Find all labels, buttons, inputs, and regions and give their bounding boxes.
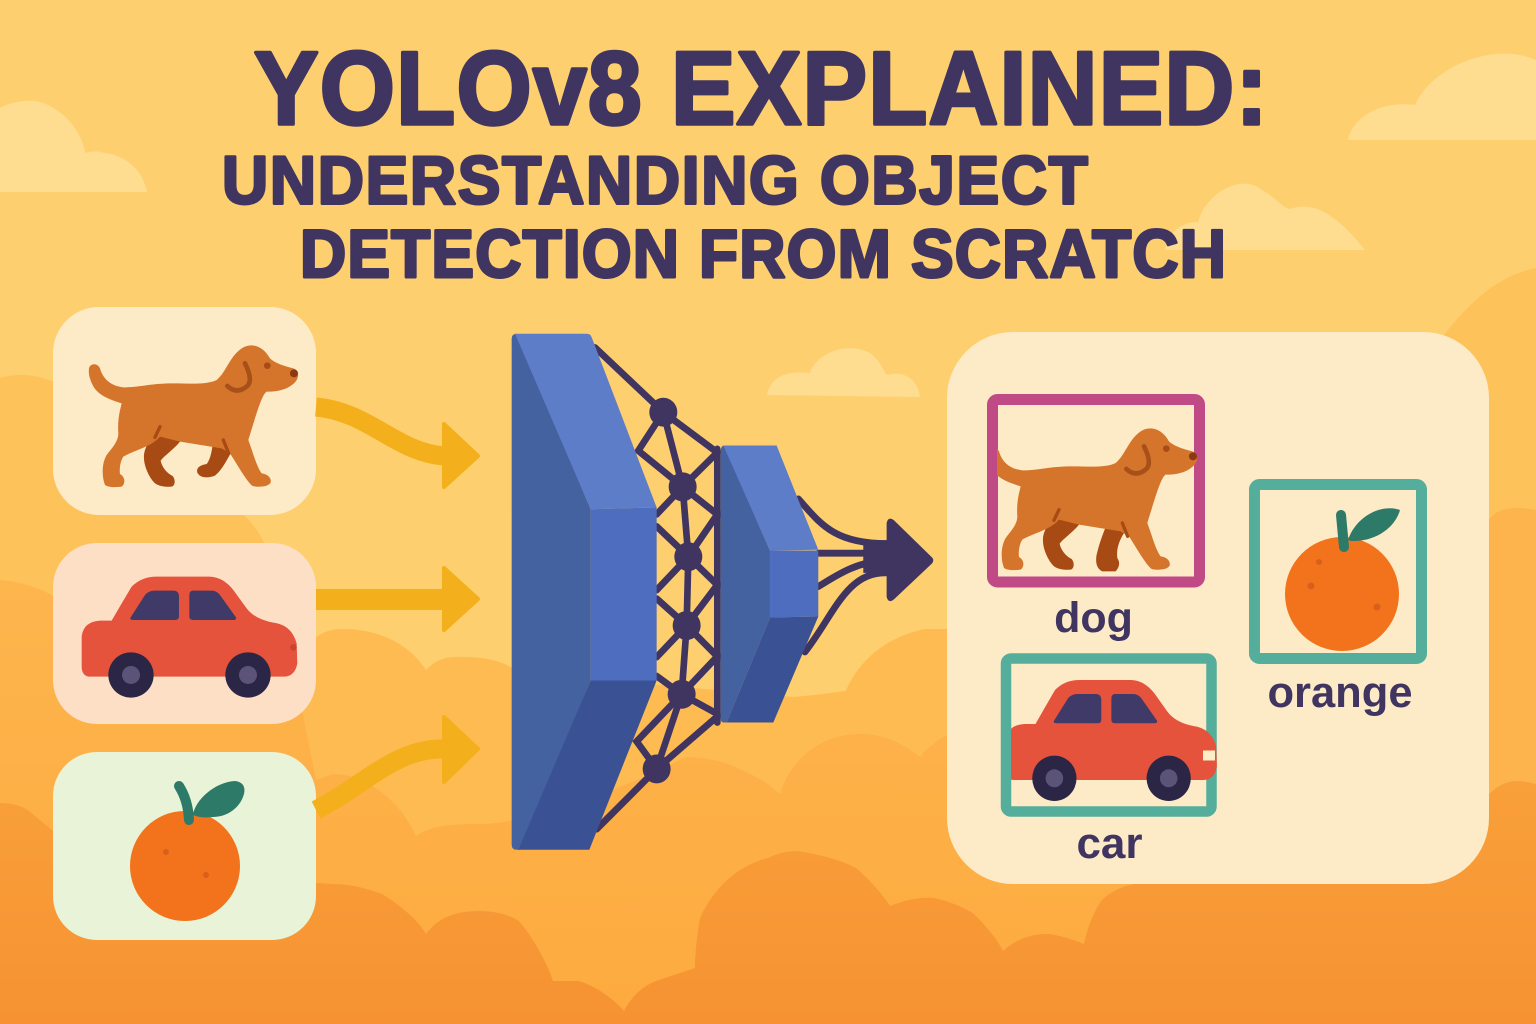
network diagram <box>512 334 933 850</box>
title: YOLOv8 EXPLAINED: <box>254 31 1268 147</box>
network nodes <box>643 398 722 783</box>
title <box>222 31 1268 291</box>
detected orange: orange <box>1267 669 1413 717</box>
title: UNDERSTANDING OBJECT <box>222 142 1088 218</box>
large layer block <box>512 334 657 850</box>
panel: dog input card <box>53 307 316 515</box>
detected dog: dog <box>1054 594 1133 642</box>
detected car: car <box>1076 819 1143 868</box>
arrow: dog to network <box>316 407 478 487</box>
panel: car input card <box>53 543 316 724</box>
detected orange <box>1254 484 1422 717</box>
output arrow <box>863 519 933 601</box>
panel: detection results <box>947 332 1489 884</box>
icon: orange <box>130 781 244 921</box>
background clouds <box>0 54 1536 397</box>
detected car <box>1006 658 1217 868</box>
arrow: orange to network <box>316 717 478 810</box>
small layer block <box>721 446 818 722</box>
network connections <box>595 348 887 829</box>
arrow: car to network <box>316 568 478 630</box>
icon: car <box>82 577 297 698</box>
title: DETECTION FROM SCRATCH <box>300 215 1226 291</box>
panel: orange input card <box>53 752 316 940</box>
background hills <box>0 268 1536 1024</box>
icon: dog <box>89 345 298 487</box>
detected dog <box>988 400 1200 642</box>
